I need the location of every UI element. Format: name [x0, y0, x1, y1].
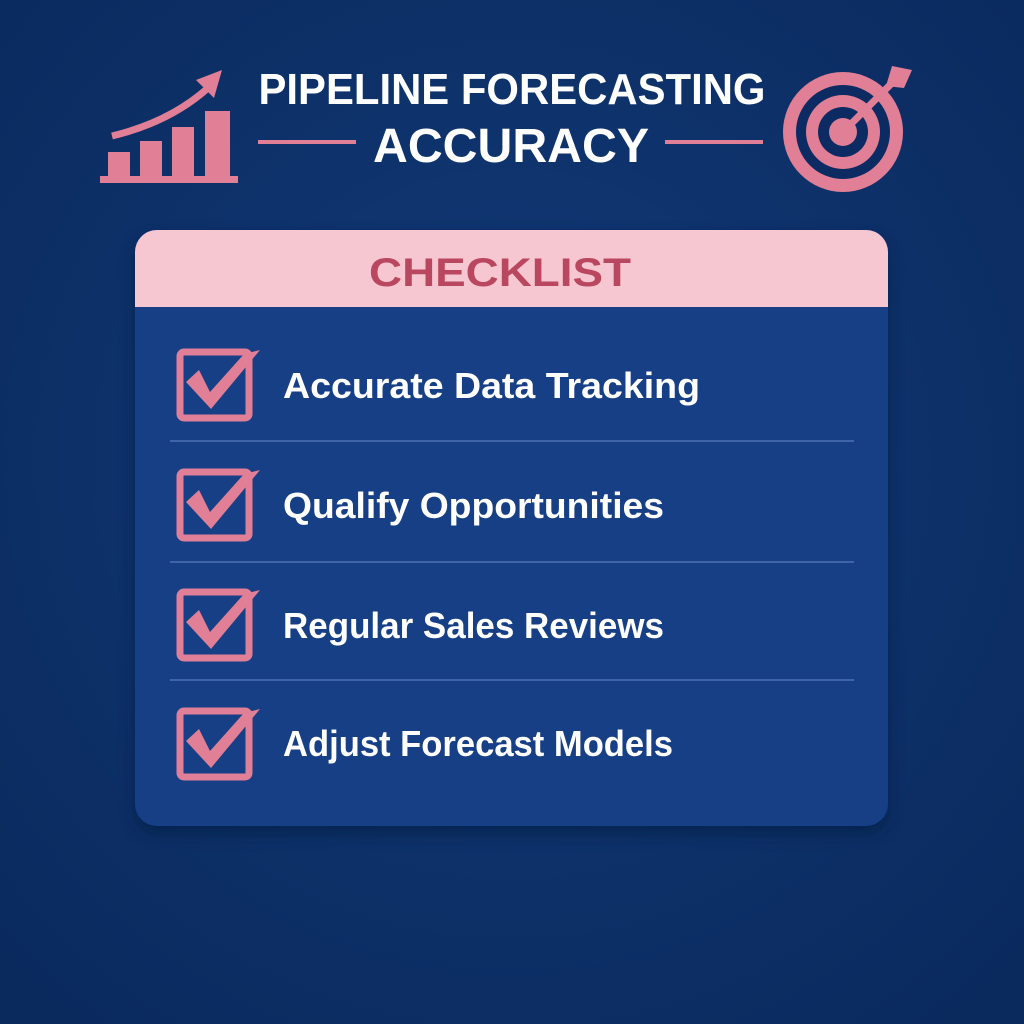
item 2: Qualify Opportunities [283, 485, 664, 526]
icon: target with arrow [783, 66, 912, 192]
item 3: Regular Sales Reviews [283, 605, 664, 646]
item 2 [180, 470, 664, 538]
panel: checklist [135, 230, 888, 826]
title: ACCURACY [373, 120, 649, 173]
panel shadow [135, 238, 888, 834]
item 1 [180, 350, 700, 418]
item 4: Adjust Forecast Models [283, 723, 673, 764]
item 3 [180, 590, 664, 658]
icon: growth bar chart [100, 70, 238, 183]
title [258, 65, 766, 173]
title: PIPELINE FORECASTING [258, 65, 766, 114]
item 4 [180, 709, 673, 777]
panel header [135, 230, 888, 307]
item 1: Accurate Data Tracking [283, 365, 700, 406]
panel header: CHECKLIST [369, 251, 631, 295]
